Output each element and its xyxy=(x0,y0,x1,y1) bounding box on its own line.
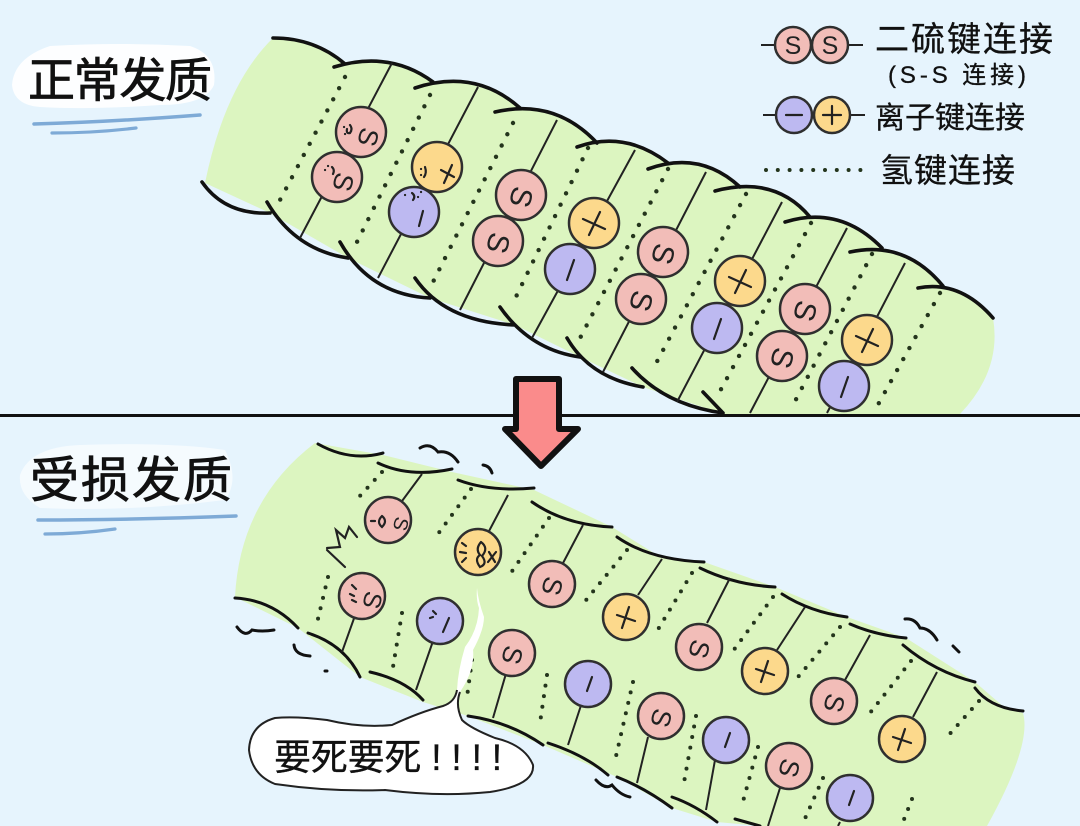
title: normal hair: 正常发质 xyxy=(28,54,212,107)
disulfide pair 2 xyxy=(473,170,546,266)
disulfide pair 4 xyxy=(757,284,830,381)
top edge scallops xyxy=(273,38,993,318)
disulfide pair 4: S xyxy=(786,297,823,325)
panel: normal hair strand xyxy=(202,38,995,414)
disulfide and ionic bonds: S xyxy=(644,705,678,731)
bottom edge fragments xyxy=(235,598,760,826)
rung lines xyxy=(342,474,937,826)
disulfide pair 1: S xyxy=(326,169,360,195)
stressed ionic bond xyxy=(417,529,501,644)
title: damaged hair xyxy=(20,444,236,534)
divider line xyxy=(0,414,1080,417)
legend: disulfide bond: 二硫键连接 xyxy=(875,21,1053,59)
stressed disulfide bond: S xyxy=(388,514,412,533)
title: damaged hair: 受损发质 xyxy=(30,454,232,508)
disulfide pair 3 xyxy=(616,227,688,324)
ionic pair 4 xyxy=(819,315,892,411)
disulfide pair 4: S xyxy=(763,344,800,372)
legend: ionic bond: 离子键连接 xyxy=(875,102,1025,135)
speech bubble xyxy=(249,588,533,794)
bottom edge scallops xyxy=(202,182,723,413)
ionic pair 1 xyxy=(389,142,462,237)
disulfide and ionic bonds: S xyxy=(535,573,569,599)
disulfide pair 3: S xyxy=(644,240,681,268)
legend: disulfide bond xyxy=(761,21,1053,89)
disulfide pair 3: S xyxy=(622,287,659,315)
legend: ionic bond xyxy=(763,97,1025,135)
legend xyxy=(761,21,1053,189)
legend: hydrogen bond: 氢键连接 xyxy=(880,152,1015,189)
hydrogen bond dots xyxy=(280,77,940,410)
stressed disulfide bond xyxy=(327,497,412,619)
disulfide and ionic bonds: S xyxy=(772,755,806,781)
arrow xyxy=(505,379,578,466)
stressed disulfide bond: S xyxy=(356,588,388,612)
top edge fragments xyxy=(318,444,1023,711)
title: normal hair xyxy=(12,44,214,133)
ionic pair 3 xyxy=(692,256,765,353)
disulfide pair 2: S xyxy=(479,229,516,257)
panel: damaged hair strand xyxy=(235,443,1024,826)
rung lines xyxy=(300,63,905,413)
legend: disulfide bond: S xyxy=(785,32,801,60)
disulfide pair 2: S xyxy=(502,183,539,211)
legend: disulfide bond: (S-S 连接) xyxy=(888,62,1026,89)
speech bubble text: 要死要死 ! ! ! ! xyxy=(274,737,502,778)
broken-off squiggles xyxy=(237,446,959,797)
disulfide and ionic bonds: S xyxy=(817,690,851,716)
hydrogen bond dots xyxy=(317,472,979,823)
legend: disulfide bond: S xyxy=(822,32,838,60)
ionic pair 2 xyxy=(545,198,619,294)
disulfide and ionic bonds: S xyxy=(682,636,716,662)
break mark xyxy=(327,527,357,567)
disulfide and ionic bonds: S xyxy=(495,642,529,668)
disulfide pair 1: S xyxy=(351,124,385,150)
disulfide and ionic bonds xyxy=(489,561,925,821)
disulfide pair 1 xyxy=(312,107,386,202)
